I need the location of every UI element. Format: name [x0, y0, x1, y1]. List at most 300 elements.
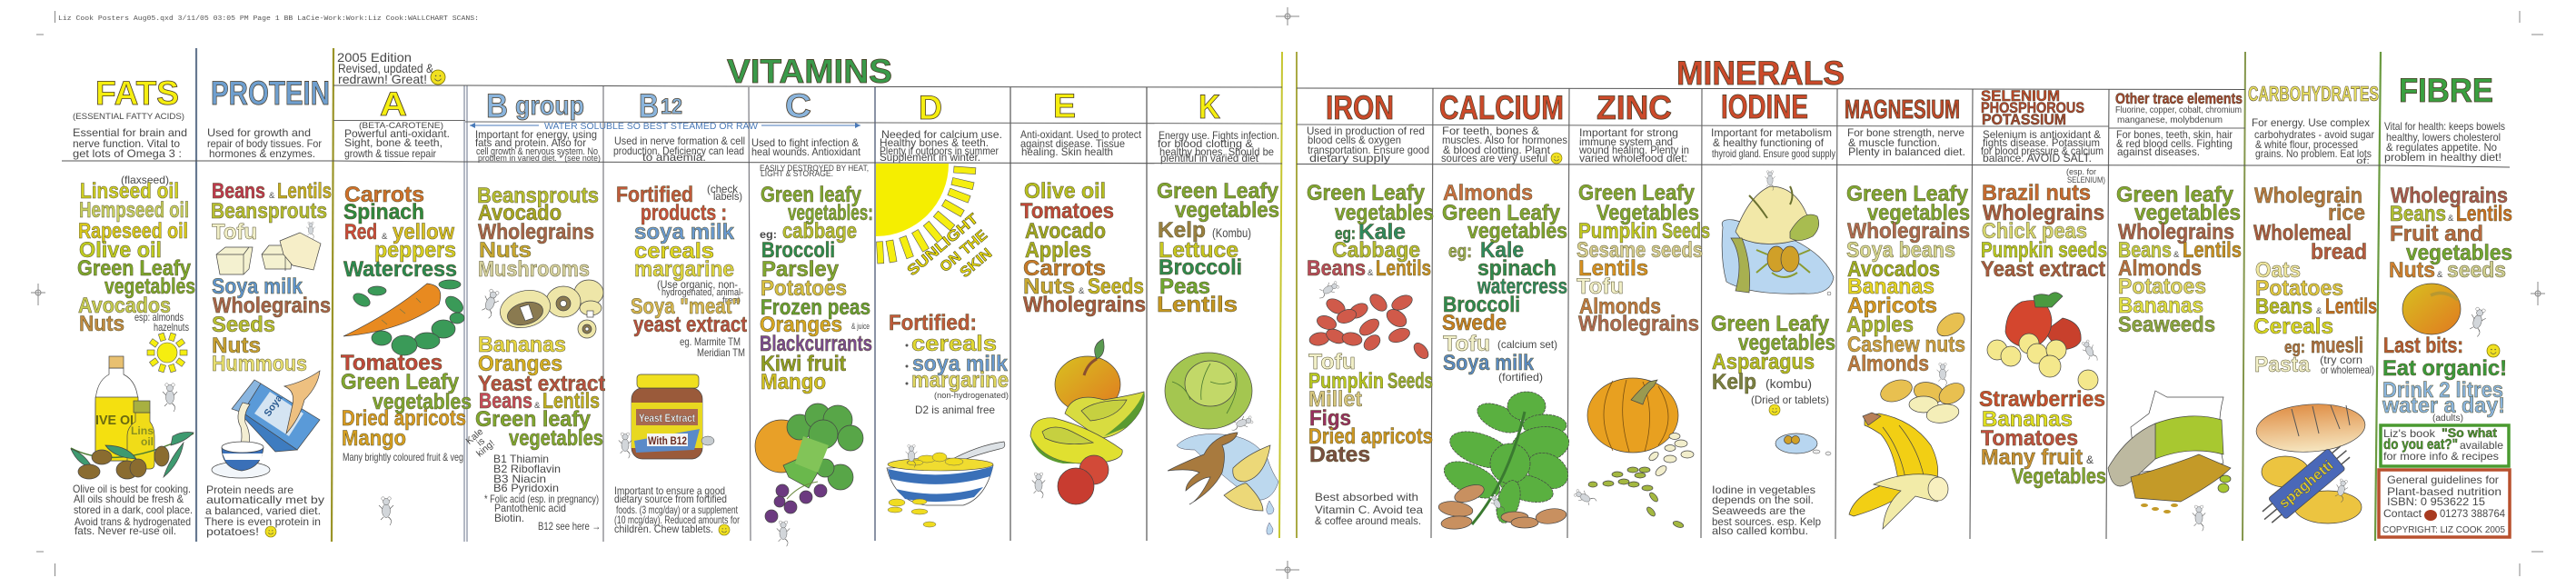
panel: iron — [1307, 89, 1434, 527]
food list: carbohydrates: or wholemeal) — [2321, 364, 2374, 376]
description: E: Anti-oxidant. Used to protect — [1020, 128, 1142, 141]
food list: zinc: Seeds — [1662, 219, 1710, 244]
food list: calcium: watercress — [1477, 274, 1567, 299]
food list: other trace elements: Wholegrains — [2118, 220, 2234, 244]
food list: calcium: Broccoli — [1443, 293, 1520, 317]
note: iodine: Iodine in vegetables — [1712, 483, 1815, 496]
food list: K: Lettuce — [1159, 238, 1238, 263]
list: B vitamins: B2 Riboflavin — [493, 463, 561, 475]
food list: fibre: & — [2448, 214, 2454, 224]
food list: other trace elements: Green leafy — [2116, 183, 2233, 207]
food list: A bottom — [341, 351, 472, 463]
banner: water soluble — [470, 121, 860, 132]
description: iodine: thyroid gland. Ensure good supply — [1712, 147, 1835, 160]
food list: zinc: Wholegrains — [1578, 312, 1699, 336]
description: fats: Essential for brain and — [73, 126, 187, 139]
food list: carbohydrates: Beans — [2255, 294, 2312, 319]
food list: E — [1020, 179, 1146, 317]
description: K: plentiful in varied diet — [1160, 152, 1259, 164]
food list: magnesium: Green Leafy — [1846, 182, 1968, 206]
food list: C: cabbage — [782, 219, 857, 244]
last bits: Last bits: — [2383, 334, 2463, 358]
icon: olive oil bottles and olive branch — [71, 356, 194, 479]
food list: fats: Hempseed oil — [79, 198, 189, 223]
description: D: Plenty if outdoors in summer — [880, 145, 999, 157]
food list: iron top: Beans — [1307, 256, 1366, 281]
food list: protein: Lentils — [277, 179, 332, 204]
description: iron: dietary supply — [1309, 152, 1390, 164]
food list: D fortified: cereals — [911, 332, 997, 356]
food list: E: Apples — [1025, 238, 1091, 263]
description: selenium: balance. AVOID SALT. — [1983, 152, 2092, 164]
note: iron: Vitamin C. Avoid tea — [1315, 503, 1423, 516]
food list: E: Nuts — [1023, 274, 1075, 299]
food list: E: Seeds — [1088, 274, 1144, 299]
food list: carbohydrates: Cereals — [2253, 314, 2333, 339]
panel: magnesium — [1845, 95, 1970, 529]
food list: calcium: Soya milk — [1443, 351, 1534, 375]
last bits: (adults) — [2432, 414, 2463, 424]
note: fats: fats. Never re-use oil. — [75, 524, 176, 537]
food list: zinc: Pumpkin — [1578, 219, 1657, 244]
description: fibre — [2384, 120, 2505, 164]
food list: A top: Carrots — [344, 183, 424, 207]
panel: fibre — [2379, 72, 2512, 537]
callout: book — [2381, 425, 2509, 466]
panel: calcium — [1437, 89, 1575, 530]
food list: iodine: (kombu) — [1765, 376, 1812, 391]
food list: calcium: Almonds — [1443, 181, 1533, 205]
food list: K: Peas — [1159, 274, 1210, 299]
icon: sun and rays — [876, 164, 995, 281]
icon: mouse — [379, 497, 393, 525]
food list: calcium: eg: — [1448, 242, 1472, 262]
icon: strawberries and chick peas — [1987, 293, 2100, 390]
title: vitamins: VITAMINS — [727, 53, 892, 90]
description: calcium: & blood clotting. Plant — [1443, 144, 1551, 156]
list: B vitamins: * Folic acid (esp. in pregnancy) — [484, 493, 599, 505]
food list: D fortified: Fortified: — [889, 311, 977, 335]
heading: B group: B — [486, 87, 508, 125]
callout: contact: 01273 388764 — [2440, 507, 2505, 520]
icon: sack of grains and peas — [2108, 391, 2231, 531]
food list: A top: yellow — [393, 220, 455, 244]
food list: A bottom: Dried apricots — [342, 406, 466, 431]
food list: C: Green leafy — [761, 183, 861, 207]
grid lines — [62, 48, 2510, 542]
food list: iodine: vegetables — [1738, 331, 1835, 355]
icon: pumpkin and seeds — [1573, 378, 1694, 529]
description: carbohydrates: carbohydrates - avoid sugar — [2254, 128, 2374, 141]
icon: sun — [147, 333, 187, 373]
description: fats: (ESSENTIAL FATTY ACIDS) — [73, 112, 184, 122]
food list: E: Tomatoes — [1020, 199, 1114, 224]
heading: iodine: IODINE — [1721, 88, 1808, 125]
food list: E: Olive oil — [1024, 179, 1106, 204]
food list: K: Green Leafy — [1157, 179, 1278, 204]
description: iron: transportation. Ensure good — [1308, 144, 1429, 156]
food list: C: Parsley — [761, 257, 839, 282]
food list: zinc: Green Leafy — [1578, 181, 1695, 205]
icon: orange, broccoli and blackcurrants — [755, 404, 863, 546]
description: zinc: wound healing. Plenty in — [1578, 144, 1689, 156]
icon: tofu blocks — [216, 222, 321, 274]
note: iodine: depends on the soil. — [1712, 493, 1814, 506]
food list: B12: labels) — [713, 190, 742, 203]
food list: carbohydrates: & — [2316, 306, 2322, 316]
food list: B12: Meridian TM — [697, 346, 745, 359]
food list: selenium top — [1981, 181, 2107, 282]
heading: B group: group — [515, 91, 584, 121]
icon: carrot and leaves — [343, 280, 466, 355]
list: B vitamins: B12 see here → — [538, 520, 601, 533]
note: fats: Avoid trans & hydrogenated — [75, 515, 191, 528]
food list: selenium top: Yeast extract — [1981, 257, 2105, 282]
food list: magnesium: Almonds — [1847, 352, 1929, 376]
food list: other trace elements — [2116, 183, 2242, 337]
food list: magnesium — [1846, 182, 1970, 376]
food list: selenium top: Brazil nuts — [1982, 181, 2091, 205]
icon: small crab thought bubble — [1775, 434, 1831, 455]
description: carbohydrates: grains. No problem. Eat lots — [2255, 147, 2372, 160]
description: other trace elements: against diseases. — [2117, 145, 2200, 158]
description: iron: Used in production of red — [1307, 125, 1425, 137]
food list: fats: Rapeseed oil — [78, 219, 188, 244]
food list: B12: cereals — [634, 239, 714, 264]
description: iodine — [1711, 126, 1835, 160]
description: other trace elements — [2115, 105, 2242, 158]
description: fats: nerve function. Vital to — [73, 137, 180, 150]
icon: cereal bowl — [887, 442, 1005, 527]
food list: A top: & — [382, 232, 388, 242]
callout: contact: General guidelines for — [2387, 473, 2499, 486]
food list: iron bottom: Dates — [1309, 443, 1370, 467]
description: fibre: problem in healthy diet! — [2384, 151, 2501, 164]
icon: yeast extract jar: Yeast Extract — [639, 412, 695, 424]
list: B vitamins: B3 Niacin — [493, 473, 546, 485]
food list: D fortified — [889, 311, 1009, 416]
food list: selenium bottom: & — [2086, 453, 2094, 466]
food list: B group bottom: Green leafy — [475, 407, 591, 432]
food list: fats: esp: almonds — [134, 311, 184, 324]
note: iodine: best sources. esp. Kelp — [1712, 515, 1821, 528]
food list: carbohydrates: Wholemeal — [2253, 221, 2352, 245]
icon: yeast extract jar — [619, 374, 714, 459]
panel: vitamin C — [751, 87, 873, 546]
food list: C: & juice — [851, 322, 870, 332]
food list: D fortified: D2 is animal free — [915, 404, 995, 416]
icon: rock pool with crab and seaweed — [1722, 171, 1834, 295]
icon: soya milk carton and cup: Soya — [263, 393, 285, 419]
food list: other trace elements: Seaweeds — [2118, 313, 2215, 337]
printer slug line: Liz Cook Posters Aug05.qxd 3/11/05 03:05 PM Page 1 BB LaCie-Work:Work:Liz Cook:WALLCHART SCANS: — [58, 15, 479, 23]
description: selenium: fights disease. Potassium — [1983, 136, 2100, 149]
food list: iron bottom — [1308, 350, 1433, 467]
description: selenium: for blood pressure & calcium — [1981, 145, 2104, 157]
food list: fibre: Beans — [2390, 202, 2446, 226]
panel: vitamin B12 — [613, 87, 747, 535]
food list: K: (Kombu) — [1212, 225, 1251, 240]
food list: fats: Linseed oil — [80, 179, 179, 204]
food list: B group bottom: Oranges — [478, 352, 562, 376]
list: B vitamins — [484, 453, 601, 533]
edition note: Revised, updated & — [338, 61, 434, 75]
description: other trace elements: For bones, teeth, skin, hair — [2116, 128, 2233, 141]
food list: fats: hazelnuts — [154, 321, 189, 334]
food list: selenium bottom: Vegetables — [2012, 464, 2106, 489]
heading: selenium phosphorous potassium: SELENIUM — [1981, 87, 2060, 105]
heading: E: E — [1053, 87, 1076, 125]
icon: kidney beans — [1308, 279, 1431, 362]
food list: zinc — [1576, 181, 1710, 336]
description: B group: problem in varied diet. * (see note) — [478, 154, 601, 163]
description: D: Supplement in winter. — [880, 151, 980, 164]
food list: B group bottom: Beans — [479, 389, 532, 414]
note: protein: a balanced, varied diet. — [205, 504, 321, 517]
note: kale is king: is — [474, 435, 487, 448]
description: fibre: & regulates appetite. No — [2386, 141, 2497, 154]
food list: magnesium: vegetables — [1867, 201, 1970, 225]
food list: protein: Tofu — [212, 220, 257, 244]
food list: B group top: Nuts — [479, 238, 532, 263]
food list: fats: Nuts — [79, 312, 124, 336]
description: B12: to anaemia. — [642, 151, 706, 164]
food list: B group bottom — [475, 333, 605, 451]
food list: K: Lentils — [1157, 293, 1238, 317]
description: fibre: Vital for health: keeps bowels — [2384, 120, 2505, 133]
description: calcium: muscles. Also for hormones — [1442, 134, 1567, 146]
food list: B12 — [616, 183, 747, 359]
food list: iron top: eg: — [1335, 224, 1356, 243]
icon: apple and mouse — [2402, 284, 2488, 337]
food list: calcium: spinach — [1477, 256, 1557, 281]
food list: carbohydrates: Wholegrain — [2254, 184, 2362, 208]
description: E: against disease. Tissue — [1020, 137, 1125, 150]
food list: B12: yeast extract — [633, 313, 747, 337]
food list: C: Potatoes — [761, 276, 847, 301]
heading: B12 — [639, 87, 682, 125]
food list: B group bottom: Bananas — [478, 333, 566, 357]
description: protein: hormones & enzymes. — [209, 147, 315, 160]
description: selenium — [1981, 128, 2105, 185]
description: other trace elements: manganese, molybdenum — [2117, 115, 2223, 125]
food list: B12: hydrogenated, animal- — [661, 287, 743, 298]
food list: protein: & — [269, 191, 275, 201]
food list: magnesium: Avocados — [1847, 257, 1940, 282]
heading: fats: FATS — [95, 75, 179, 112]
food list: A bottom: Tomatoes — [341, 351, 443, 375]
food list: C: vegetables: — [788, 201, 873, 225]
food list: fibre: Lentils — [2456, 202, 2512, 226]
food list: carbohydrates: Potatoes — [2255, 276, 2343, 301]
description: protein — [207, 126, 322, 160]
food list: fats: Avocados — [78, 294, 171, 318]
list: B vitamins: B6 Pyridoxin — [493, 482, 559, 494]
heading: carbohydrates: CARBOHYDRATES — [2248, 82, 2379, 105]
description: B12: Used in nerve formation & cell — [614, 135, 745, 147]
food list: calcium: (calcium set) — [1497, 338, 1557, 351]
description: calcium: For teeth, bones & — [1442, 125, 1539, 137]
food list: magnesium: Apricots — [1847, 294, 1937, 318]
food list: other trace elements: Potatoes — [2118, 274, 2206, 299]
panel: other trace elements — [2108, 90, 2243, 531]
description: calcium: sources are very useful — [1441, 152, 1547, 164]
food list: iron top — [1307, 181, 1434, 281]
title: minerals: MINERALS — [1676, 55, 1845, 92]
note: fats: All oils should be fresh & — [74, 493, 184, 505]
last bits: water a day! — [2382, 394, 2505, 418]
food list: protein — [211, 179, 332, 376]
panel: selenium phosphorous potassium — [1979, 87, 2107, 489]
food list: other trace elements: Beans — [2118, 238, 2172, 263]
description: fibre: healthy, lowers cholesterol — [2386, 131, 2501, 144]
description: selenium: SELENIUM) — [2067, 175, 2105, 185]
note: protein — [204, 483, 324, 538]
description: selenium: Selenium is antioxidant & — [1983, 128, 2101, 141]
food list: iron top: Lentils — [1376, 256, 1431, 281]
description: E — [1020, 128, 1142, 158]
food list: B12: margarine — [634, 257, 734, 282]
callout: contact: ISBN: 0 953622 15 — [2387, 495, 2485, 508]
panel: fats — [71, 75, 195, 537]
food list: E: Wholegrains — [1023, 293, 1146, 317]
food list: iodine: Asparagus — [1712, 350, 1815, 374]
description: A: (BETA-CAROTENE) — [359, 121, 443, 131]
food list: iodine — [1711, 312, 1835, 415]
note: iodine — [1712, 483, 1821, 537]
icon: kale and almonds — [1437, 392, 1575, 530]
icon: olive oil bottles and olive branch: Lins — [131, 424, 154, 437]
heading: C: C — [785, 87, 811, 125]
food list: fibre: & — [2437, 270, 2443, 280]
food list: calcium: Swede — [1442, 311, 1507, 335]
description: magnesium: Plenty in balanced diet. — [1848, 145, 1965, 158]
description: A: Sight, bone & teeth, — [344, 136, 443, 149]
food list: protein: Soya milk — [212, 274, 303, 299]
food list: A bottom: vegetables — [373, 390, 472, 414]
heading: selenium phosphorous potassium: POTASSIUM — [1982, 111, 2066, 128]
panel: vitamin A — [337, 50, 472, 525]
note: fats: Olive oil is best for cooking. — [73, 483, 191, 495]
food list: iron bottom: Seeds — [1387, 369, 1433, 394]
description: iodine: Important for metabolism — [1711, 126, 1832, 139]
food list: carbohydrates: eg: — [2284, 338, 2305, 356]
heading: calcium: CALCIUM — [1439, 89, 1564, 126]
food list: B12: Fortified — [616, 183, 693, 207]
icon: olive oil bottles and olive branch: oil — [141, 435, 154, 448]
icon: cashews and apple slices — [1877, 308, 1969, 425]
callout: contact: COPYRIGHT: LIZ COOK 2005 — [2382, 525, 2505, 535]
food list: fats: Green Leafy — [77, 256, 191, 281]
panel: vitamin D — [876, 89, 1009, 527]
description: A: growth & tissue repair — [344, 147, 436, 160]
note: B12: children. Chew tablets. — [614, 523, 713, 535]
panel: carbohydrates — [2248, 82, 2379, 530]
callout: book: available — [2460, 439, 2503, 452]
description: C: heal wounds. Antioxidant — [751, 145, 861, 158]
food list: C: Kiwi fruit — [761, 352, 846, 376]
food list: B group bottom: Yeast extract — [478, 372, 605, 396]
description: B12 — [613, 135, 745, 164]
description: E: healing. Skin health — [1021, 145, 1113, 158]
heading: K: K — [1198, 88, 1220, 125]
food list: other trace elements: & — [2173, 250, 2180, 260]
callout: book: Liz's book — [2383, 427, 2436, 440]
panel: vitamin E — [1020, 87, 1146, 504]
callout: book: for more info & recipes — [2383, 450, 2499, 463]
description: iodine: & healthy functioning of — [1713, 136, 1825, 149]
food list: B group bottom: & — [534, 401, 541, 411]
callout: contact — [2379, 470, 2510, 537]
heading: D: D — [919, 89, 942, 126]
callout: contact: Plant-based nutrition — [2387, 485, 2501, 498]
icon: olive oil bottles and olive branch: IVE OI — [95, 413, 134, 428]
heading: A: A — [380, 85, 407, 123]
last bits — [2382, 334, 2507, 424]
note: protein: Protein needs are — [206, 483, 293, 496]
food list: calcium: Kale — [1480, 238, 1524, 263]
food list: magnesium: Apples — [1846, 313, 1914, 337]
description: calcium — [1441, 125, 1567, 164]
food list: A bottom: Mango — [342, 426, 406, 451]
note: protein: There is even protein in — [204, 515, 321, 528]
food list: K: Broccoli — [1159, 255, 1242, 280]
icon: mushrooms — [478, 280, 603, 338]
edition note: 2005 Edition — [337, 50, 412, 65]
food list: B12: soya milk — [634, 220, 734, 244]
food list: C: eg: — [760, 228, 777, 241]
icon: soya milk carton and cup — [212, 371, 320, 478]
food list: carbohydrates: Lentils — [2325, 294, 2377, 319]
food list: B group top: Avocado — [478, 201, 562, 225]
note: B12: Important to ensure a good — [614, 484, 725, 497]
food list: C: Blackcurrants — [760, 332, 872, 356]
food list: iron bottom: Dried apricots — [1308, 424, 1433, 449]
description: zinc: immune system and — [1579, 135, 1673, 148]
note: protein: automatically met by — [206, 493, 324, 506]
food list: protein: Hummous — [212, 352, 307, 376]
food list: selenium bottom — [1979, 387, 2106, 489]
panel: iodine — [1711, 88, 1835, 537]
food list: magnesium: Wholegrains — [1847, 219, 1970, 244]
icon: apple, avocados and tomatoes — [1030, 339, 1144, 504]
food list: C: Oranges — [760, 313, 842, 337]
food list: calcium: (fortified) — [1498, 371, 1543, 384]
last bits: Drink 2 litres — [2382, 378, 2503, 403]
description: magnesium — [1847, 126, 1965, 158]
food list: protein: Nuts — [212, 334, 261, 358]
description: selenium: (esp. for — [2066, 167, 2096, 177]
food list: magnesium: Bananas — [1847, 274, 1934, 299]
food list: fats — [77, 174, 195, 336]
food list: iron top: Kale — [1358, 220, 1406, 244]
food list: protein: Seeds — [212, 313, 275, 337]
heading: magnesium: MAGNESIUM — [1845, 95, 1960, 125]
food list: carbohydrates: bread — [2311, 240, 2367, 264]
food list: A top: Spinach — [343, 200, 424, 224]
food list: D fortified: soya milk — [912, 352, 1008, 376]
food list: iron bottom: Pumpkin — [1308, 369, 1384, 394]
food list: B12: eg. Marmite TM — [680, 335, 741, 348]
food list: A bottom: Green Leafy — [341, 370, 459, 394]
food list: A bottom: Many brightly coloured fruit & veg — [343, 451, 463, 463]
description: B group: fats and protein. Also for — [475, 136, 586, 149]
panel: zinc — [1573, 89, 1710, 529]
food list: iron bottom: Tofu — [1308, 350, 1356, 374]
food list: A top: Red — [344, 220, 377, 244]
food list: zinc: Lentils — [1578, 256, 1648, 281]
icon: sun and rays: SKIN — [958, 245, 995, 281]
